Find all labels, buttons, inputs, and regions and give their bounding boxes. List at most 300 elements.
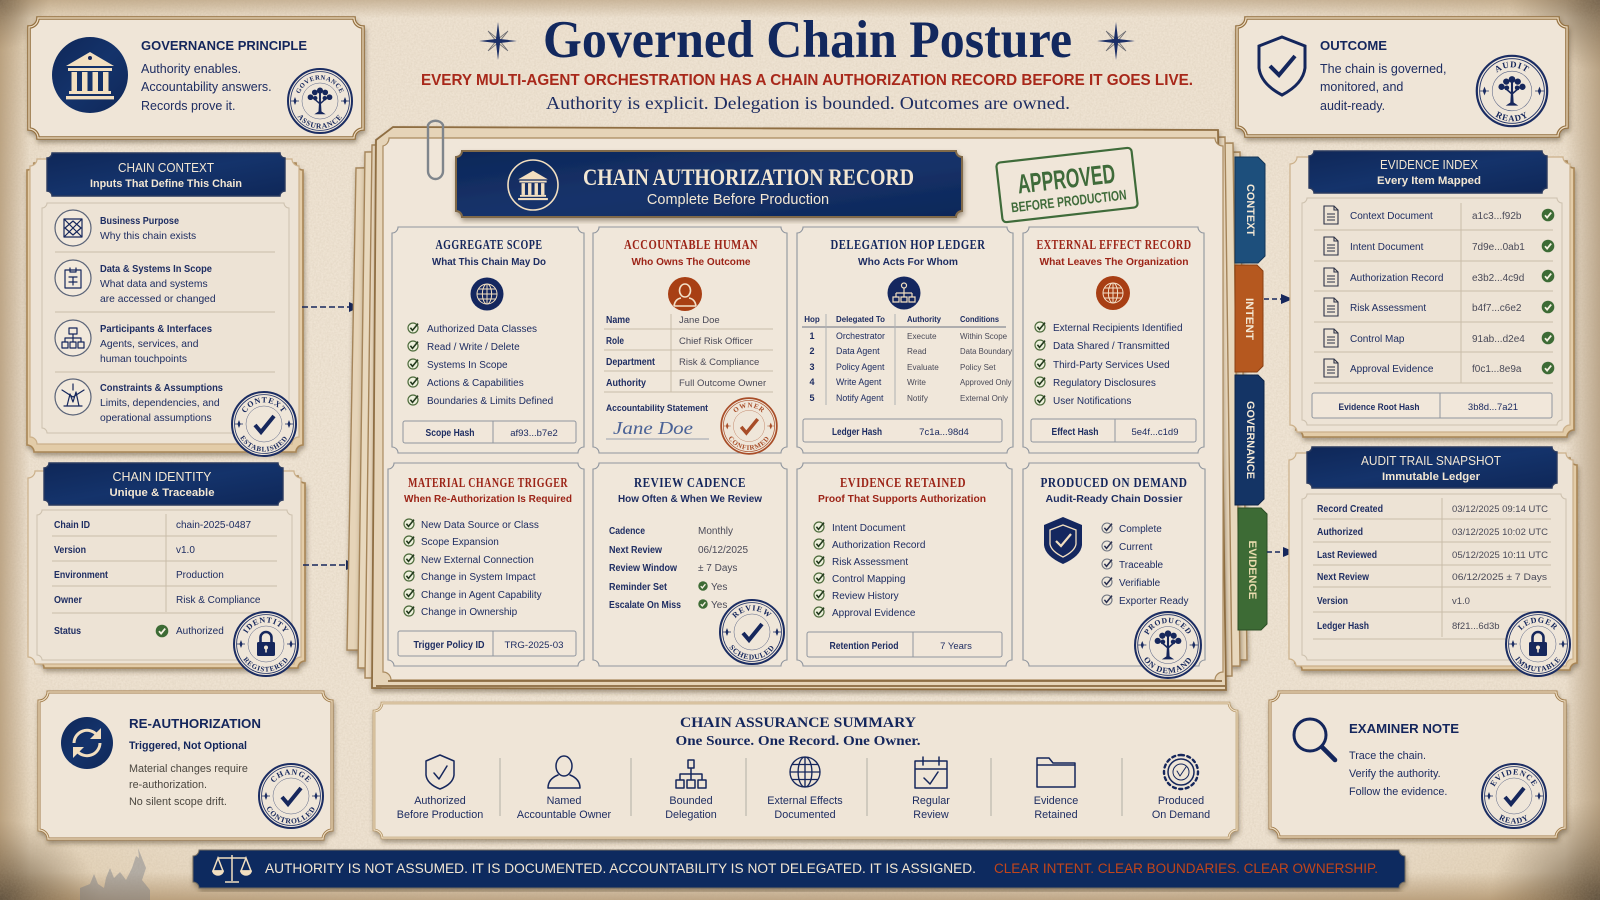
banner: chain context: CHAIN CONTEXT [118, 160, 214, 175]
text block: Follow the evidence. [1349, 786, 1447, 798]
schedule details: Cadence [609, 526, 645, 537]
schedule details: Escalate On Miss [609, 600, 681, 611]
text block: Authority enables. [141, 62, 241, 76]
item: regular review [912, 757, 950, 821]
icon: globe [1096, 276, 1130, 310]
item: external effects documented: Documented [774, 809, 836, 821]
banner: chain authorization record [456, 151, 962, 217]
stamp: ledger immutable [1505, 611, 1571, 677]
panel: chain identity [27, 462, 310, 677]
stamp: evidence ready: EVIDENCE [1490, 769, 1538, 787]
stamp: evidence ready: READY [1498, 814, 1528, 824]
panel: external effect record [1023, 227, 1204, 453]
panel: governance principle [25, 16, 369, 146]
stamp: audit ready: AUDIT [1496, 61, 1530, 73]
checklist: Verifiable [1119, 578, 1161, 589]
icon: shield [1044, 517, 1082, 564]
row: constraints: operational assumptions [100, 413, 212, 424]
stamp: identity registered: IDENTITY [242, 617, 289, 634]
text block: Trace the chain. [1349, 750, 1426, 762]
ledger table: Authority [907, 314, 941, 324]
checklist: Actions & Capabilities [427, 378, 524, 389]
panel: outcome [1233, 16, 1573, 144]
accountability statement: Accountability Statement [606, 403, 709, 414]
table: owner details: Role [606, 336, 624, 347]
ledger table: Notify [907, 394, 929, 403]
table: chain identity: v1.0 [176, 545, 195, 556]
stamp: change controlled: CONTROLLED [267, 806, 314, 824]
ledger table: 1 [809, 331, 815, 341]
banner: evidence index [1309, 151, 1547, 193]
schedule details: Yes [711, 600, 727, 611]
subheading: One Source. One Record. One Owner. [676, 733, 920, 748]
stamp: governance assurance: GOVERNANCE [296, 75, 344, 93]
heading: ACCOUNTABLE HUMAN [624, 237, 758, 252]
subheading: Who Owns The Outcome [632, 256, 751, 268]
icon: magnifier [1294, 719, 1335, 760]
checklist: Third-Party Services Used [1053, 360, 1170, 371]
panel: accountable human [592, 226, 788, 455]
ledger table: Write Agent [836, 377, 882, 387]
checklist: Change in Agent Capability [421, 590, 542, 601]
banner: chain context: Inputs That Define This Chain [90, 178, 242, 190]
checklist: Read / Write / Delete [427, 342, 520, 353]
table: evidence items: Risk Assessment [1350, 303, 1426, 314]
ledger table: Write [907, 378, 926, 387]
item: evidence retained [1034, 758, 1078, 821]
schedule details [609, 526, 748, 611]
checklist: Complete [1119, 524, 1162, 535]
icon: globe [470, 278, 504, 310]
tab: governance [1235, 375, 1264, 505]
subheading: What Leaves The Organization [1040, 256, 1188, 268]
banner: evidence index: Every Item Mapped [1377, 175, 1481, 187]
heading: EXAMINER NOTE [1349, 721, 1459, 736]
stamp: ledger immutable: IMMUTABLE [1515, 656, 1560, 672]
hash box: Scope Hash [426, 428, 474, 439]
checklist [1035, 322, 1183, 407]
ledger table: Delegated To [836, 314, 885, 324]
text block: audit-ready. [1320, 99, 1385, 113]
table: owner details: Department [606, 357, 656, 368]
item: produced on demand: Produced [1158, 795, 1204, 807]
ledger table: Orchestrator [836, 331, 885, 341]
stamp: identity registered: REGISTERED [243, 656, 288, 672]
table: evidence items: Control Map [1350, 334, 1405, 345]
item: evidence retained: Retained [1034, 809, 1078, 821]
arrow: identity to record [303, 560, 358, 570]
heading: MATERIAL CHANGE TRIGGER [408, 475, 568, 490]
stamp: context established [231, 391, 297, 457]
schedule details: Reminder Set [609, 582, 668, 593]
hash box: 7c1a...98d4 [919, 427, 969, 438]
table: evidence items [1314, 203, 1554, 383]
row: data and systems: Data & Systems In Scope [100, 264, 212, 275]
row: participants: Participants & Interfaces [100, 324, 212, 335]
table: owner details: Full Outcome Owner [679, 378, 766, 389]
panel: examiner note [1266, 690, 1570, 844]
checklist: Review History [832, 591, 899, 602]
panel: material change trigger [388, 463, 584, 666]
subheading: Audit-Ready Chain Dossier [1046, 493, 1182, 505]
icon: scales [213, 855, 251, 882]
stamp: approved before production: BEFORE PRODUCTION [1010, 186, 1127, 215]
stamp: audit ready: READY [1495, 111, 1527, 122]
tab: evidence [1238, 508, 1267, 630]
table: evidence items: Context Document [1350, 211, 1433, 222]
subheading: Complete Before Production [647, 192, 829, 208]
heading: RE-AUTHORIZATION [129, 716, 261, 731]
retention box: Retention Period [830, 641, 898, 652]
ledger table: Data Agent [836, 346, 880, 356]
text block: monitored, and [1320, 80, 1403, 94]
checklist: Authorized Data Classes [427, 324, 537, 335]
row: business purpose: Business Purpose [100, 216, 179, 227]
schedule details: Yes [711, 582, 727, 593]
panel: evidence retained [797, 463, 1012, 666]
stamp: owner confirmed [720, 397, 778, 455]
item: bounded delegation: Delegation [665, 809, 717, 821]
heading: CHAIN AUTHORIZATION RECORD [583, 165, 914, 190]
retention box [807, 632, 1002, 657]
ledger table: Hop [804, 315, 820, 324]
table: evidence items: f0c1...8e9a [1472, 364, 1522, 375]
icon: paperclip [428, 121, 443, 179]
icon: refresh [61, 717, 113, 769]
table: evidence items: a1c3...f92b [1472, 211, 1522, 222]
item: external effects documented [767, 757, 843, 821]
icon: institution seal [508, 160, 558, 210]
row: participants [55, 320, 212, 365]
heading: REVIEW CADENCE [634, 475, 746, 490]
item: named accountable owner: Accountable Owner [517, 809, 612, 821]
table: chain identity: Risk & Compliance [176, 595, 261, 606]
table: audit trail: Last Reviewed [1317, 550, 1377, 561]
stamp: owner confirmed: CONFIRMED [729, 436, 768, 450]
hash box: Effect Hash [1052, 427, 1098, 438]
icon: person [668, 277, 702, 311]
subtitle: EVERY MULTI-AGENT ORCHESTRATION HAS A CHAIN AUTHORIZATION RECORD BEFORE IT GOES LIVE. [421, 72, 1193, 89]
text block: Material changes require [129, 763, 248, 775]
stamp: identity registered [233, 611, 299, 677]
checklist: Approval Evidence [832, 608, 916, 619]
item: external effects documented: External Effects [767, 795, 843, 807]
item: produced on demand [1152, 755, 1210, 821]
panel: chain authorization record document stack [344, 120, 1268, 697]
tab: context [1235, 157, 1265, 263]
arrow: tabs to audit trail [1267, 547, 1295, 557]
item: regular review: Review [913, 809, 949, 821]
ledger table: Policy Agent [836, 362, 885, 372]
row: business purpose: Why this chain exists [100, 231, 196, 242]
checklist: Intent Document [832, 523, 906, 534]
text block: Verify the authority. [1349, 768, 1441, 780]
table: evidence items: Authorization Record [1350, 273, 1443, 284]
stamp: context established: CONTEXT [242, 397, 286, 412]
statement: AUTHORITY IS NOT ASSUMED. IT IS DOCUMENTED. ACCOUNTABILITY IS NOT DELEGATED. IT IS ASSIGNED. [265, 861, 976, 876]
row: business purpose [55, 210, 196, 246]
text block [141, 62, 272, 113]
item: produced on demand: On Demand [1152, 809, 1210, 821]
table: chain identity: Authorized [176, 626, 224, 637]
stamp: change controlled [258, 763, 324, 829]
subheading: Proof That Supports Authorization [818, 494, 986, 505]
text block [1349, 750, 1447, 798]
text block: No silent scope drift. [129, 796, 227, 808]
stamp: approved before production: APPROVED [1016, 159, 1117, 199]
heading: CHAIN ASSURANCE SUMMARY [680, 715, 916, 731]
checklist: Traceable [1119, 560, 1164, 571]
schedule details: Next Review [609, 545, 662, 556]
checklist: Systems In Scope [427, 360, 508, 371]
stamp: governance assurance: ASSURANCE [297, 114, 342, 129]
title: Governed Chain Posture [543, 11, 1072, 69]
ledger table [802, 314, 1012, 405]
icon: shield check [1259, 37, 1305, 95]
row: constraints: Constraints & Assumptions [100, 383, 223, 394]
schedule details: 06/12/2025 [698, 545, 748, 556]
subheading: When Re-Authorization Is Required [404, 494, 572, 505]
stamp: evidence ready [1481, 763, 1547, 829]
ledger table: Within Scope [960, 332, 1008, 341]
ledger table: 4 [809, 377, 815, 387]
schedule details: Review Window [609, 563, 677, 574]
stamp: governance assurance [287, 68, 353, 134]
stamp: review scheduled [719, 599, 785, 665]
panel: review cadence [592, 462, 788, 666]
panel: chain assurance summary [374, 703, 1237, 838]
table: chain identity: chain-2025-0487 [176, 520, 251, 531]
tab: intent [1235, 265, 1263, 372]
tab: intent: INTENT [1243, 298, 1255, 340]
banner: chain identity: Unique & Traceable [110, 487, 214, 499]
table: audit trail: Version [1317, 596, 1348, 607]
accountability statement: Jane Doe [613, 418, 693, 438]
statement: accent: CLEAR INTENT. CLEAR BOUNDARIES. CLEAR OWNERSHIP. [994, 861, 1378, 876]
stamp: review scheduled: REVIEW [732, 605, 772, 618]
hash box [1312, 393, 1552, 418]
table: chain identity: Owner [54, 595, 82, 606]
checklist: Scope Expansion [421, 537, 499, 548]
stamp: approved before production [996, 147, 1138, 223]
checklist: Authorization Record [832, 540, 925, 551]
arrow: context to record [302, 302, 360, 312]
ledger table: Read [907, 347, 927, 356]
heading: AGGREGATE SCOPE [436, 237, 542, 252]
ledger table: Execute [907, 332, 937, 341]
heading: OUTCOME [1320, 38, 1387, 53]
stamp: context established: ESTABLISHED [240, 435, 287, 452]
text block: re-authorization. [129, 779, 207, 791]
accountability statement [606, 403, 709, 439]
ledger table: 2 [809, 346, 815, 356]
item: evidence retained: Evidence [1034, 795, 1078, 807]
policy box [398, 631, 576, 656]
policy box: TRG-2025-03 [504, 640, 564, 651]
table: evidence items: 91ab...d2e4 [1472, 334, 1525, 345]
table: chain identity: Status [54, 626, 81, 637]
banner: audit trail: AUDIT TRAIL SNAPSHOT [1361, 453, 1501, 468]
checklist: New Data Source or Class [421, 520, 539, 531]
tagline: Authority is explicit. Delegation is bounded. Outcomes are owned. [546, 93, 1070, 113]
checklist [1102, 523, 1188, 607]
ledger table: Approved Only [960, 378, 1012, 387]
subheading: How Often & When We Review [618, 493, 763, 505]
table: evidence items: b4f7...c6e2 [1472, 303, 1522, 314]
table: audit trail: 06/12/2025 ± 7 Days [1452, 572, 1547, 583]
table: audit trail: Record Created [1317, 504, 1383, 515]
banner: footer statement [193, 850, 1405, 888]
tab: governance: GOVERNANCE [1244, 401, 1256, 479]
banner: audit trail [1307, 447, 1557, 488]
table: owner details: Jane Doe [679, 315, 720, 326]
row: constraints: Limits, dependencies, and [100, 398, 220, 409]
item: authorized before production [397, 755, 483, 821]
panel: aggregate scope [392, 227, 584, 453]
table: audit trail: 8f21...6d3b [1452, 621, 1500, 632]
table: audit trail: 03/12/2025 10:02 UTC [1452, 527, 1548, 538]
banner: audit trail: Immutable Ledger [1382, 471, 1481, 483]
ledger table: Notify Agent [836, 393, 884, 403]
stamp: ledger immutable: LEDGER [1518, 617, 1557, 630]
table: owner details: Name [606, 315, 630, 326]
table: evidence items: Approval Evidence [1350, 364, 1434, 375]
panel: re-authorization [36, 690, 338, 846]
table: evidence items: 7d9e...0ab1 [1472, 242, 1525, 253]
icon: compass left [479, 22, 517, 60]
ledger table: Policy Set [960, 363, 996, 372]
checklist: Risk Assessment [832, 557, 908, 568]
row: participants: human touchpoints [100, 354, 187, 365]
row: data and systems: What data and systems [100, 279, 208, 290]
subheading: What This Chain May Do [432, 256, 546, 268]
table: audit trail [1313, 498, 1551, 639]
arrow: tabs to evidence index [1264, 294, 1293, 304]
heading: EVIDENCE RETAINED [840, 475, 966, 490]
icon: institution [52, 37, 128, 113]
table: audit trail: 03/12/2025 09:14 UTC [1452, 504, 1548, 515]
table: owner details: Authority [606, 378, 646, 389]
table: audit trail: Authorized [1317, 527, 1363, 538]
checklist: Control Mapping [832, 574, 905, 585]
table: audit trail: Next Review [1317, 572, 1369, 583]
heading: PRODUCED ON DEMAND [1040, 475, 1188, 490]
table: chain identity: Production [176, 570, 224, 581]
tabs [1235, 157, 1267, 630]
subheading: Triggered, Not Optional [129, 740, 247, 752]
subheading: Who Acts For Whom [858, 256, 958, 268]
item: named accountable owner: Named [547, 795, 581, 807]
row: data and systems [55, 260, 216, 305]
item: bounded delegation: Bounded [669, 795, 713, 807]
panel: audit trail snapshot [1288, 446, 1582, 677]
tab: evidence: EVIDENCE [1246, 540, 1258, 600]
decorative town silhouette [80, 848, 150, 900]
item: bounded delegation [665, 760, 717, 821]
checklist [408, 323, 553, 407]
checklist [814, 522, 925, 619]
item: named accountable owner [517, 756, 612, 821]
icon: compass right [1097, 22, 1135, 60]
text block: The chain is governed, [1320, 62, 1446, 76]
table: audit trail: 05/12/2025 10:11 UTC [1452, 550, 1548, 561]
banner: chain identity: CHAIN IDENTITY [112, 469, 212, 484]
item: regular review: Regular [912, 795, 950, 807]
checklist: Exporter Ready [1119, 596, 1188, 607]
banner: evidence index: EVIDENCE INDEX [1380, 157, 1478, 172]
stamp: produced on demand [1134, 611, 1202, 679]
stamp: produced on demand: PRODUCED [1144, 618, 1191, 635]
stamp: change controlled: CHANGE [271, 769, 311, 782]
text block [1320, 62, 1446, 113]
stamp: owner confirmed: OWNER [734, 402, 764, 413]
checklist: User Notifications [1053, 396, 1131, 407]
hash box: 3b8d...7a21 [1468, 402, 1518, 413]
panel: produced on demand [1022, 462, 1206, 679]
policy box: Trigger Policy ID [414, 640, 484, 651]
checklist: Data Shared / Transmitted [1053, 341, 1170, 352]
table: audit trail: Ledger Hash [1317, 621, 1369, 632]
hash box [803, 419, 1002, 442]
hash box [403, 421, 576, 443]
hash box: 5e4f...c1d9 [1131, 427, 1179, 438]
ledger table: External Only [960, 394, 1008, 403]
table: owner details: Risk & Compliance [679, 357, 759, 368]
table: chain identity: Chain ID [54, 520, 90, 531]
heading: DELEGATION HOP LEDGER [830, 237, 986, 252]
tab: context: CONTEXT [1244, 184, 1256, 236]
hash box: af93...b7e2 [510, 428, 558, 439]
checklist: New External Connection [421, 555, 534, 566]
checklist: Current [1119, 542, 1153, 553]
banner: chain context [47, 153, 285, 196]
schedule details: Monthly [698, 526, 733, 537]
table: audit trail: v1.0 [1452, 596, 1470, 607]
panel: chain context [24, 152, 308, 459]
heading: EXTERNAL EFFECT RECORD [1036, 237, 1192, 252]
panel: evidence index [1290, 151, 1574, 437]
checklist: Change in System Impact [421, 572, 536, 583]
item: authorized before production: Authorized [414, 795, 466, 807]
item: authorized before production: Before Production [397, 809, 483, 821]
row: constraints [55, 379, 223, 424]
ledger table: Data Boundary [960, 347, 1012, 356]
table: chain identity [52, 514, 277, 637]
ledger table: Conditions [960, 314, 999, 324]
table: chain identity: Version [54, 545, 86, 556]
checklist: Change in Ownership [421, 607, 518, 618]
checklist [404, 519, 542, 618]
banner: chain identity [44, 463, 283, 505]
ledger table: 5 [809, 393, 815, 403]
checklist: External Recipients Identified [1053, 323, 1183, 334]
ledger table: Evaluate [907, 363, 939, 372]
text block [129, 763, 248, 808]
hash box: Ledger Hash [832, 427, 882, 438]
table: evidence items: e3b2...4c9d [1472, 273, 1524, 284]
checklist: Regulatory Disclosures [1053, 378, 1156, 389]
checklist: Boundaries & Limits Defined [427, 396, 553, 407]
table: owner details: Chief Risk Officer [679, 336, 753, 347]
panel: delegation hop ledger [797, 227, 1013, 453]
row: data and systems: are accessed or changed [100, 294, 216, 305]
stamp: audit ready [1476, 54, 1548, 128]
text block: Records prove it. [141, 99, 235, 113]
retention box: 7 Years [940, 641, 972, 652]
ledger table: 3 [809, 362, 815, 372]
stamp: review scheduled: SCHEDULED [729, 645, 774, 660]
hash box: Evidence Root Hash [1338, 402, 1420, 413]
